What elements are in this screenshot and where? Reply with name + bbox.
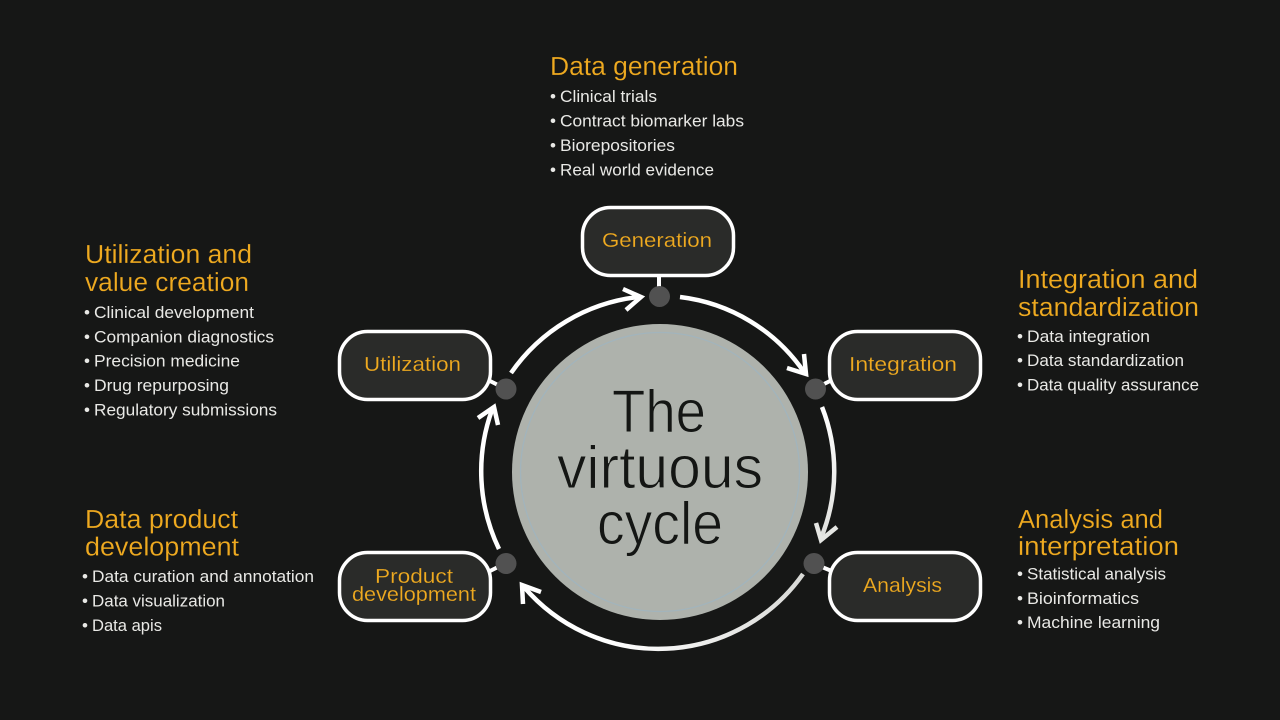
text block: analysis and interpretation: interpretation bbox=[1018, 533, 1179, 561]
arrow: utilization to generation bbox=[511, 289, 641, 373]
arrow: product development to utilization bbox=[478, 407, 499, 549]
central circle: the virtuous cycle: The bbox=[612, 378, 706, 445]
node: analysis bbox=[804, 552, 980, 620]
node: utilization: Utilization bbox=[364, 353, 461, 376]
text block: utilization and value creation: • bbox=[84, 352, 90, 370]
text block: data product development: Data apis bbox=[92, 616, 162, 635]
text block: integration and standardization: Data standardization bbox=[1027, 351, 1184, 370]
arrow: integration to analysis bbox=[816, 407, 837, 540]
text block: integration and standardization: Data quality assurance bbox=[1027, 376, 1199, 394]
text block: data product development: development bbox=[85, 534, 239, 562]
text block: utilization and value creation bbox=[84, 241, 277, 420]
text block: utilization and value creation: Drug repurposing bbox=[94, 376, 229, 395]
text block: utilization and value creation: Companion diagnostics bbox=[94, 328, 274, 346]
node: analysis: Analysis bbox=[863, 574, 942, 597]
node: product development: development bbox=[352, 583, 476, 606]
text block: data generation: Clinical trials bbox=[560, 87, 657, 106]
text block: data product development: • bbox=[82, 567, 88, 586]
node: product development: Product bbox=[375, 565, 453, 588]
text block: utilization and value creation: • bbox=[84, 328, 90, 346]
node: integration: Integration bbox=[849, 353, 957, 376]
text block: data generation: • bbox=[550, 160, 556, 180]
text block: data generation: Biorepositories bbox=[560, 136, 675, 155]
text block: data product development: Data product bbox=[85, 506, 238, 534]
central circle: the virtuous cycle: cycle bbox=[597, 490, 723, 557]
text block: integration and standardization: standardization bbox=[1018, 294, 1199, 322]
text block: utilization and value creation: • bbox=[84, 400, 90, 420]
text block: analysis and interpretation: Statistical analysis bbox=[1027, 564, 1166, 584]
text block: integration and standardization: • bbox=[1017, 376, 1023, 394]
node: product development bbox=[340, 552, 516, 620]
node: generation bbox=[582, 208, 734, 307]
text block: integration and standardization: • bbox=[1017, 351, 1023, 370]
text block: utilization and value creation: • bbox=[84, 376, 90, 395]
text block: analysis and interpretation: Machine learning bbox=[1027, 613, 1160, 632]
text block: data product development: • bbox=[82, 592, 88, 610]
arrow: analysis to product development bbox=[522, 574, 803, 649]
text block: analysis and interpretation: • bbox=[1017, 589, 1023, 608]
text block: utilization and value creation: • bbox=[84, 303, 90, 322]
text block: data generation: Data generation bbox=[550, 53, 738, 81]
text block: data generation: • bbox=[550, 112, 556, 130]
text block: integration and standardization: • bbox=[1017, 327, 1023, 346]
text block: data generation: Contract biomarker labs bbox=[560, 112, 744, 130]
text block: analysis and interpretation: • bbox=[1017, 613, 1023, 632]
text block: data generation: • bbox=[550, 87, 556, 106]
text block: data product development: • bbox=[82, 616, 88, 635]
text block: analysis and interpretation: • bbox=[1017, 564, 1023, 584]
node: generation: Generation bbox=[602, 229, 712, 252]
node: utilization bbox=[340, 332, 516, 400]
text block: analysis and interpretation: Analysis and bbox=[1018, 506, 1163, 534]
central circle: the virtuous cycle bbox=[512, 324, 808, 620]
text block: analysis and interpretation bbox=[1017, 506, 1179, 632]
text block: data product development: Data curation and annotation bbox=[92, 567, 314, 586]
node: integration bbox=[805, 332, 980, 400]
text block: data product development: Data visualization bbox=[92, 592, 225, 610]
text block: integration and standardization: Data integration bbox=[1027, 327, 1150, 346]
text block: utilization and value creation: value creation bbox=[85, 269, 249, 297]
text block: utilization and value creation: Clinical development bbox=[94, 303, 254, 322]
text block: analysis and interpretation: Bioinformatics bbox=[1027, 589, 1139, 608]
central circle: the virtuous cycle: virtuous bbox=[557, 434, 763, 501]
text block: data product development bbox=[82, 506, 314, 635]
text block: utilization and value creation: Regulatory submissions bbox=[94, 400, 277, 420]
text block: data generation: • bbox=[550, 136, 556, 155]
text block: data generation: Real world evidence bbox=[560, 160, 714, 180]
text block: utilization and value creation: Precision medicine bbox=[94, 352, 240, 370]
text block: utilization and value creation: Utilization and bbox=[85, 241, 252, 269]
text block: integration and standardization: Integration and bbox=[1018, 266, 1198, 294]
text block: integration and standardization bbox=[1017, 266, 1199, 394]
text block: data generation bbox=[550, 53, 744, 180]
arrow: generation to integration bbox=[680, 297, 806, 374]
